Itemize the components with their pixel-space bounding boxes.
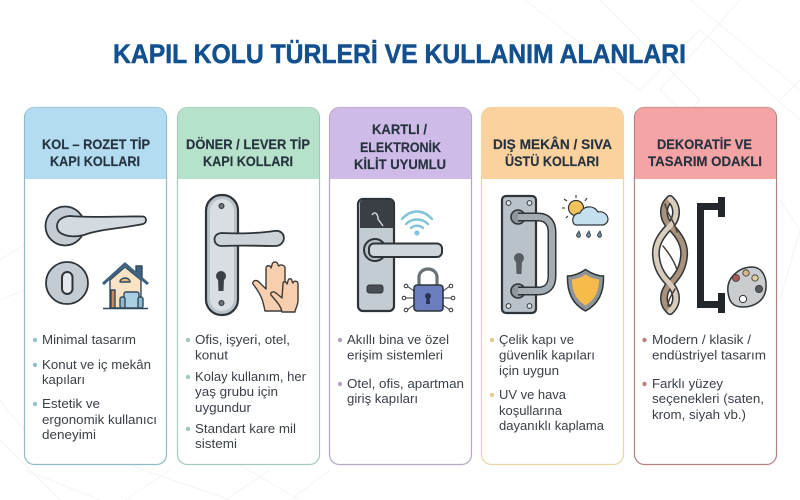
- list: kartli elektronik: [338, 332, 464, 406]
- panel header: dis mekan: ÜSTÜ KOLLARI: [505, 154, 599, 169]
- icon: twisted handle: [656, 199, 684, 311]
- list: dekoratif: seçenekleri (saten,: [652, 391, 764, 406]
- panel header: doner lever: DÖNER / LEVER TİP: [186, 137, 310, 152]
- list: dis mekan: için uygun: [499, 363, 559, 378]
- list: kartli elektronik: erişim sistemleri: [347, 348, 443, 362]
- list: dekoratif: krom, siyah vb.): [652, 407, 746, 422]
- icon: black bar handle: [697, 197, 725, 313]
- list: dis mekan: dayanıklı kaplama: [499, 418, 605, 433]
- icon: long plate lever: [206, 195, 284, 315]
- icon: wifi: [402, 212, 432, 236]
- panel header: kol rozet: [25, 108, 166, 179]
- panel: doner lever: [178, 108, 320, 464]
- list: kol rozet: Minimal tasarım: [42, 332, 136, 347]
- list: dis mekan: Çelik kapı ve: [499, 332, 574, 347]
- list: doner lever: Kolay kullanım, her: [195, 369, 307, 384]
- list: kol rozet: Estetik ve: [42, 396, 100, 411]
- icon: weather: [562, 195, 608, 237]
- list: dekoratif: [642, 332, 766, 422]
- panel header: kartli elektronik: KARTLI /: [372, 122, 427, 137]
- panel: kartli elektronik: [330, 108, 472, 464]
- icon: shield: [567, 270, 604, 311]
- panel header: kartli elektronik: KİLİT UYUMLU: [354, 157, 446, 172]
- panel header: dekoratif: DEKORATİF VE: [657, 137, 752, 152]
- list: kol rozet: kapıları: [42, 372, 85, 387]
- list: kol rozet: Konut ve iç mekân: [42, 357, 151, 372]
- icon: padlock circuit: [402, 269, 455, 312]
- list: doner lever: sistemi: [195, 436, 237, 451]
- panel header: kol rozet: KAPI KOLLARI: [50, 154, 140, 169]
- list: kol rozet: ergonomik kullanıcı: [42, 412, 157, 427]
- panel header: doner lever: KAPI KOLLARI: [203, 154, 293, 169]
- list: doner lever: Standart kare mil: [195, 421, 296, 436]
- panel header: dis mekan: [482, 108, 623, 179]
- panel: dis mekan: [482, 108, 624, 464]
- icon: house: [103, 264, 148, 308]
- list: doner lever: [186, 332, 307, 451]
- list: dekoratif: Farklı yüzey: [652, 376, 724, 391]
- icon: palette: [728, 267, 766, 307]
- list: dis mekan: UV ve hava: [499, 387, 567, 402]
- list: doner lever: Ofis, işyeri, otel,: [195, 332, 290, 347]
- list: dis mekan: güvenlik kapıları: [499, 348, 595, 362]
- panel header: dekoratif: [635, 108, 776, 179]
- title: KAPIL KOLU TÜRLERİ VE KULLANIM ALANLARI: [113, 39, 686, 69]
- list: doner lever: uygundur: [195, 400, 252, 415]
- panel header: dis mekan: DIŞ MEKÂN / SIVA: [493, 137, 612, 152]
- list: kol rozet: deneyimi: [42, 427, 96, 442]
- panel header: kartli elektronik: ELEKTRONİK: [360, 140, 441, 155]
- panel header: kol rozet: KOL – ROZET TİP: [42, 137, 150, 152]
- list: doner lever: konut: [195, 348, 228, 362]
- list: kartli elektronik: Akıllı bina ve özel: [347, 332, 449, 347]
- list: dekoratif: Modern / klasik /: [652, 332, 751, 347]
- panel header: kartli elektronik: [330, 108, 471, 179]
- list: dis mekan: koşullarına: [499, 403, 563, 418]
- panel: kol rozet: [24, 108, 166, 464]
- list: dekoratif: endüstriyel tasarım: [652, 348, 766, 362]
- list: dis mekan: [490, 332, 605, 433]
- icon: electronic lock: [358, 199, 442, 311]
- panel header: doner lever: [178, 108, 319, 179]
- list: kol rozet: [33, 332, 157, 442]
- list: kartli elektronik: giriş kapıları: [347, 391, 418, 406]
- icon: keyhole rosette: [46, 262, 88, 304]
- icon: hands: [253, 262, 298, 312]
- panel: dekoratif: [634, 108, 776, 464]
- list: doner lever: yaş grubu için: [195, 384, 278, 399]
- icon: lever handle on rosette: [46, 206, 146, 246]
- panel header: dekoratif: TASARIM ODAKLI: [648, 154, 762, 169]
- icon: surface plate handle: [502, 196, 552, 313]
- list: kartli elektronik: Otel, ofis, apartman: [347, 376, 464, 391]
